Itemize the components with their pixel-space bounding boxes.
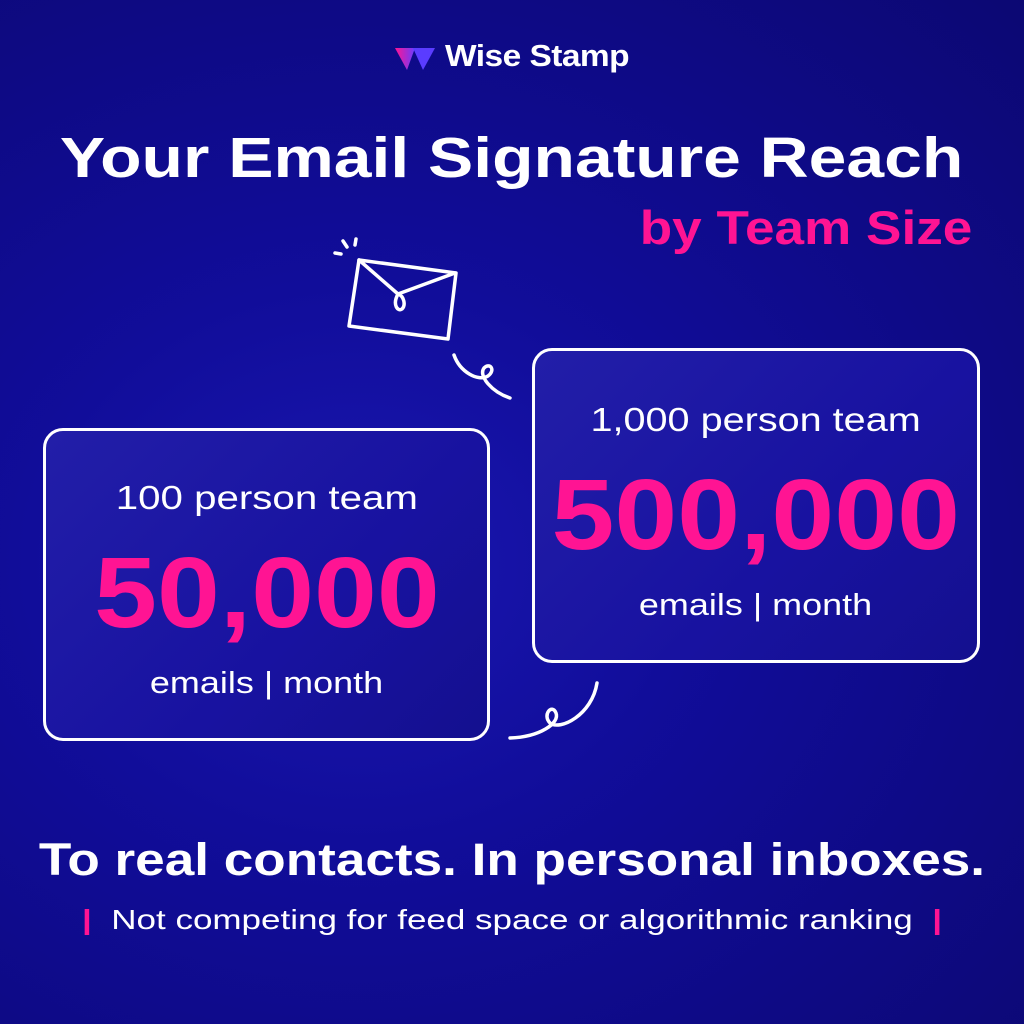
icon: envelope xyxy=(333,237,512,400)
subtitle: by Team Size xyxy=(639,201,972,254)
icon: logo mark xyxy=(395,48,435,70)
panel: 1,000 person team: 500,000 xyxy=(552,459,960,571)
panel: 100 person team: 100 person team xyxy=(115,479,418,516)
connector curl bottom xyxy=(508,681,599,740)
bottom subtext: | Not competing for feed space or algorithmic ranking | xyxy=(82,904,942,935)
panel: 1,000 person team: 1,000 person team xyxy=(591,401,921,438)
logo xyxy=(395,38,629,73)
title: Your Email Signature Reach xyxy=(60,126,964,190)
panel: 1,000 person team: emails | month xyxy=(639,587,873,622)
panel: 1,000 person team xyxy=(532,348,980,663)
brand name: Wise Stamp xyxy=(445,38,629,73)
connector curl xyxy=(454,355,510,398)
panel: 100 person team: emails | month xyxy=(150,665,383,700)
bottom headline: To real contacts. In personal inboxes. xyxy=(39,834,985,885)
panel: 100 person team: 50,000 xyxy=(94,537,439,649)
panel: 100 person team xyxy=(43,428,490,741)
